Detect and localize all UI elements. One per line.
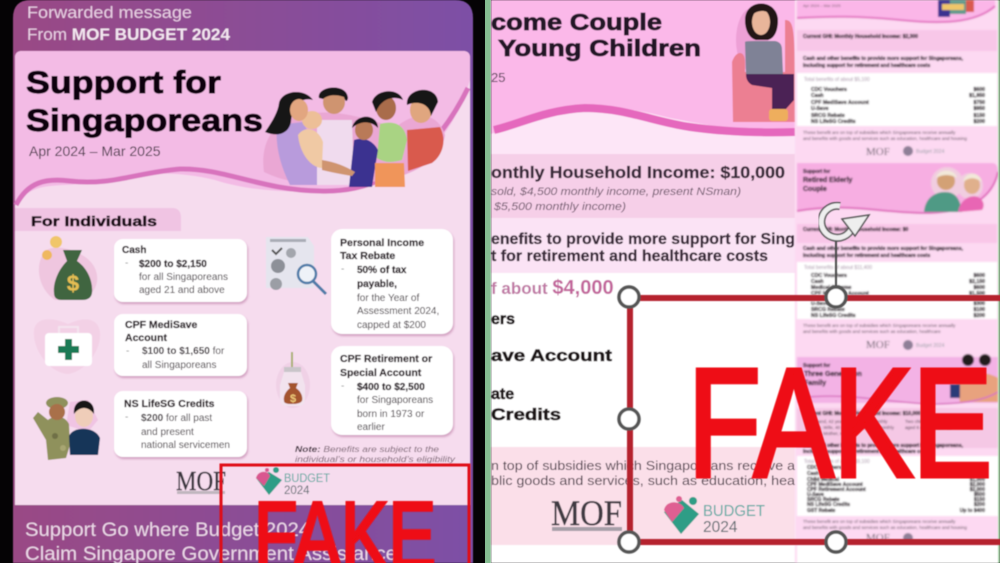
card: Personal Income Tax Rebate	[331, 229, 453, 334]
thumbnail: three generation family: Cash	[807, 471, 819, 477]
selection handles	[619, 287, 846, 552]
thumbnail: three generation family: Up to $400	[960, 508, 985, 514]
thumbnail: retired elderly couple: $1,500	[969, 291, 985, 297]
card: CPF MediSave Account: -	[126, 346, 129, 357]
thin right edge	[998, 0, 1000, 563]
card: NS LifeSG Credits: and present	[141, 427, 194, 438]
footer note band: n top of subsidies which Singaporeans receive a	[491, 459, 795, 473]
illustration: family thumbnail	[950, 354, 998, 402]
thumbnail: retired elderly couple: Cash and other benefits to provide more support for Singaporeans,	[803, 246, 964, 252]
thumbnail: retired elderly couple: SRCG Rebate	[811, 307, 845, 313]
note: individual’s or household’s eligibility	[295, 455, 456, 464]
card: CPF Retirement or Special Account: for Singaporeans	[357, 395, 433, 406]
card: CPF Retirement or Special Account: Special Account	[340, 367, 422, 379]
divider: green edge	[485, 0, 491, 563]
thumbnail: first document	[797, 0, 997, 158]
income band: sold, $4,500 monthly income, present NSman)	[491, 186, 741, 198]
thumbnail: first document: SRCG Rebate	[811, 113, 845, 119]
logo: MOF large: MOF	[551, 493, 622, 533]
thumbnail: first document: U-Save	[811, 106, 829, 112]
thumbnail: retired elderly couple: $600	[973, 273, 985, 279]
thumbnail: first document: Total benefits of about $5,100	[804, 77, 870, 83]
thumbnail: first document: Cash	[811, 93, 824, 99]
infographic card	[15, 51, 470, 505]
card: NS LifeSG Credits: NS LifeSG Credits	[124, 398, 215, 410]
title: 25	[491, 70, 505, 85]
thumbnail: first document: $950	[973, 106, 985, 112]
card: CPF Retirement or Special Account: -	[341, 381, 344, 392]
title	[26, 64, 263, 138]
benefits list	[491, 311, 612, 424]
card: CPF MediSave Account: all Singaporeans	[142, 360, 216, 371]
income band	[491, 154, 795, 218]
title: Support for	[26, 64, 221, 100]
card: CPF Retirement or Special Account: born in 1973 or	[357, 409, 425, 420]
thumbnail: three generation family: CPF MediSave Account	[807, 482, 863, 488]
thumbnail: three generation family: Three Generation	[804, 371, 862, 378]
thumbnail: three generation family: These benefit are on top of subsidies which Singaporeans receive annually	[803, 519, 956, 524]
section tag: For Individuals	[15, 208, 181, 231]
thumbnail: first document: MOF	[866, 146, 890, 158]
card: Cash: Cash	[122, 245, 146, 256]
thumbnail: first document: $750	[973, 100, 985, 106]
thumbnail: first document: CDC Vouchers	[811, 87, 847, 93]
forwarded message header: Forwarded message	[27, 4, 192, 22]
thumbnail: three generation family: GST Rebate	[807, 508, 836, 514]
thumbnail: three generation family: Cash and other benefits to provide more support for Singaporeans,	[803, 443, 964, 449]
thumbnail: three generation family: $600	[974, 465, 985, 471]
total benefits: f about $4,000	[491, 277, 614, 299]
footer band: Support Go where Budget 2024	[25, 519, 310, 541]
logo: Budget large: BUDGET	[703, 503, 766, 520]
card: Personal Income Tax Rebate: payable,	[357, 279, 397, 290]
panel: left phone screenshot	[13, 0, 473, 563]
title: come Couple	[491, 9, 662, 35]
icon: servicemen	[33, 397, 100, 460]
benefits list: ate	[491, 386, 514, 403]
card: NS LifeSG Credits: national servicemen	[141, 440, 230, 451]
stamp: FAKE selected box on right screenshot	[619, 287, 1000, 552]
benefits list: ers	[491, 311, 515, 328]
thumbnail: first document: $1,850	[969, 93, 985, 99]
thumbnail: retired elderly couple: Retired Elderly	[803, 177, 853, 184]
card: Personal Income Tax Rebate: capped at $200	[357, 320, 426, 331]
icon: jar with money bag	[276, 352, 310, 408]
thumbnail: first document: and benefits with goods and services such as education, healthcare and housing	[803, 136, 967, 141]
rotate handle icon	[821, 206, 869, 290]
income band: $5,500 monthly income)	[493, 201, 626, 213]
card: CPF Retirement or Special Account: $400 to $2,500	[357, 382, 425, 393]
logo: Budget large: 2024	[703, 519, 738, 536]
thumbnail: three generation family: $150	[974, 497, 985, 503]
logo: Budget 2024: BUDGET	[284, 471, 331, 485]
card: Personal Income Tax Rebate: for the Year of	[357, 293, 419, 304]
note	[295, 445, 456, 464]
thumbnail: first document: $600	[973, 87, 985, 93]
card: Personal Income Tax Rebate: 50% of tax	[357, 265, 407, 276]
thumbnail: retired elderly couple: $600	[973, 285, 985, 291]
thumbnail: retired elderly couple: Total benefits of about $11,400	[804, 265, 872, 271]
card: NS LifeSG Credits: -	[125, 412, 128, 423]
stamp: FAKE on left screenshot	[221, 465, 469, 563]
card: CPF Retirement or Special Account: CPF Retirement or	[340, 353, 432, 365]
card: NS LifeSG Credits	[114, 391, 247, 457]
thumbnail: three generation family: CDC Vouchers	[807, 465, 842, 471]
thumbnail: first document: Budget 2024	[916, 149, 945, 155]
thumbnail: three generation family: (Husband, 42 years old, $4,500 monthly	[806, 419, 888, 424]
thumbnail: three generation family: Two children,	[905, 419, 932, 424]
benefits intro	[491, 218, 795, 273]
date range: Apr 2024 – Mar 2025	[29, 143, 161, 159]
illustration: family crop	[938, 0, 974, 17]
logo: MOF: MOF	[176, 466, 226, 496]
card: CPF Retirement or Special Account: earlier	[357, 422, 385, 433]
card: Personal Income Tax Rebate: Tax Rebate	[340, 250, 395, 262]
thumbnail: three generation family: $500	[974, 471, 985, 477]
thumbnail: retired elderly couple: Budget 2024	[916, 343, 945, 349]
thumbnail: three generation family	[797, 354, 998, 563]
thumbnail: retired elderly couple: $2,150	[969, 279, 985, 285]
thumbnail: three generation family: Support for	[803, 363, 830, 369]
income band: onthly Household Income: $10,000	[491, 163, 785, 182]
pink header with wave	[15, 51, 470, 205]
document: low income couple	[491, 0, 796, 545]
thumbnail: retired elderly couple	[797, 163, 998, 351]
thumbnail: first document: $200	[973, 119, 985, 125]
benefits list: ave Account	[491, 346, 612, 365]
illustration: elderly couple	[924, 167, 984, 212]
section tag: For Individuals: For Individuals	[31, 213, 157, 229]
thumbnail: first document: CPF MediSave Account	[811, 100, 869, 106]
thumbnail: retired elderly couple: NS LifeSG Credits	[811, 313, 856, 319]
card: CPF MediSave Account: Account	[125, 332, 168, 344]
thumbnail: retired elderly couple: Current GHI: Monthly Household Income: $0	[803, 227, 909, 233]
card: Cash	[114, 239, 247, 302]
thumbnail: three generation family: $2,000	[970, 482, 985, 488]
thumbnail: three generation family: Total benefits of about $9,100	[804, 459, 870, 465]
thumbnail: three generation family: NS LifeSG Credits	[807, 502, 850, 508]
card: NS LifeSG Credits: $200 for all past	[141, 413, 212, 424]
thumbnail: three generation family: CPF Retirement Account	[807, 487, 866, 493]
card: Cash: -	[125, 258, 128, 269]
panel: right document	[491, 0, 1000, 563]
thumbnail: three generation family: income, Wife, 40 years old, $3,500 monthly	[806, 425, 895, 430]
card: Personal Income Tax Rebate: -	[341, 264, 344, 275]
benefits intro: enefits to provide more support for Sing	[491, 231, 795, 248]
illustration: grandmother in armchair	[732, 4, 795, 122]
card: Personal Income Tax Rebate: Personal Income	[340, 237, 424, 249]
benefits list: Credits	[491, 405, 561, 424]
thumbnail: retired elderly couple: Support for	[803, 169, 830, 175]
logo: Budget 2024	[256, 467, 331, 497]
thumbnail: retired elderly couple: U-Save	[811, 301, 829, 307]
thumbnail: retired elderly couple: $200	[973, 313, 985, 319]
thumbnail: retired elderly couple: CDC Vouchers	[811, 273, 847, 279]
thumbnail: retired elderly couple: Medical Scheme	[811, 285, 851, 291]
thumbnail: retired elderly couple: and benefits with goods and services such as education, healthcare	[803, 329, 941, 334]
thumbnail: retired elderly couple: including support for retirement and healthcare costs	[803, 253, 930, 259]
thumbnail: retired elderly couple: $300	[973, 301, 985, 307]
thumbnail: three generation family: MOF	[866, 532, 890, 544]
benefits intro: t for retirement and healthcare costs	[491, 248, 768, 265]
icon: money bag	[39, 236, 97, 300]
thumbnail: three generation family: $500	[974, 492, 985, 498]
thumbnail: retired elderly couple: $100	[973, 307, 985, 313]
thumbnail: retired elderly couple: Cash	[811, 279, 824, 285]
thumbnail: three generation family: including support for retirement and healthcare costs	[803, 449, 930, 455]
title: Young Children	[498, 35, 701, 61]
thumbnail: first document: Current GHI: Monthly Household Income: $2,300	[803, 34, 918, 40]
title: Singaporeans	[26, 102, 263, 138]
thumbnail: three generation family: $200	[974, 502, 985, 508]
thumbnail: three generation family: $1,000	[970, 477, 985, 483]
card: CPF Retirement or Special Account	[331, 346, 453, 435]
illustration: family	[263, 87, 445, 187]
logo: Budget 2024: 2024	[284, 485, 310, 497]
document thumbnails column	[795, 0, 998, 563]
logo: Budget large	[664, 496, 766, 536]
thumbnail: first document: NS LifeSG Credits	[811, 119, 856, 125]
thumbnail: retired elderly couple: These benefit are on top of subsidies which Singaporeans receive annually	[803, 323, 956, 328]
forwarded message header	[13, 0, 473, 563]
thumbnail: first document: Cash and other benefits to provide more support for Singaporeans,	[803, 56, 964, 62]
icon: tax document with magnifier	[266, 237, 326, 294]
icon: medical kit	[34, 319, 100, 374]
thumbnail: first document: $150	[973, 113, 985, 119]
thumbnail: three generation family: $2,000	[970, 487, 985, 493]
card: CPF MediSave Account	[114, 314, 247, 376]
thumbnail: three generation family: aged 6 and 9 years old	[905, 425, 952, 430]
thumbnail: first document: Apr 2024 – Mar 2025	[803, 3, 841, 8]
icon: jar with money bag: $	[290, 393, 296, 405]
thumbnail: first document: including support for retirement and healthcare costs	[803, 63, 930, 69]
thumbnail: three generation family: and benefits with goods and services such as education, healthcare and housing	[803, 525, 967, 530]
thumbnail: three generation family: Family	[804, 380, 826, 387]
thumbnail: first document: These benefit are on top of subsidies which Singaporeans receive annually	[803, 130, 956, 135]
card: Cash: for all Singaporeans	[139, 272, 228, 283]
icon: money bag: $	[67, 271, 79, 296]
title	[491, 9, 701, 85]
thumbnail: retired elderly couple: Couple	[803, 186, 827, 193]
footer note band: blic goods and services, such as education, hea	[491, 474, 795, 488]
white list area	[491, 273, 795, 448]
thumbnail: three generation family: income, Mother, retired)	[806, 431, 855, 436]
thumbnail: three generation family: Child Medical	[807, 477, 840, 483]
note: Note: Benefits are subject to the	[295, 445, 440, 454]
card: Cash: $200 to $2,150	[139, 259, 207, 270]
card: Personal Income Tax Rebate: Assessment 2024,	[357, 306, 439, 317]
thumbnail: three generation family: U-Save	[807, 492, 824, 498]
card: Cash: aged 21 and above	[139, 285, 225, 296]
card: CPF MediSave Account: CPF MediSave	[125, 319, 198, 331]
card: CPF MediSave Account: $100 to $1,650 for	[142, 346, 225, 357]
thumbnail: three generation family: SRCG Rebate	[807, 497, 840, 503]
thumbnail: three generation family: Current GHI: Monthly Household Income: $10,000	[803, 411, 921, 417]
thumbnail: retired elderly couple: MOF	[866, 339, 890, 351]
thumbnail: retired elderly couple: CPF MediSave Account	[811, 291, 869, 297]
footer band	[13, 505, 470, 563]
forwarded message header: From MOF BUDGET 2024	[27, 26, 231, 44]
footer note band	[491, 447, 795, 545]
